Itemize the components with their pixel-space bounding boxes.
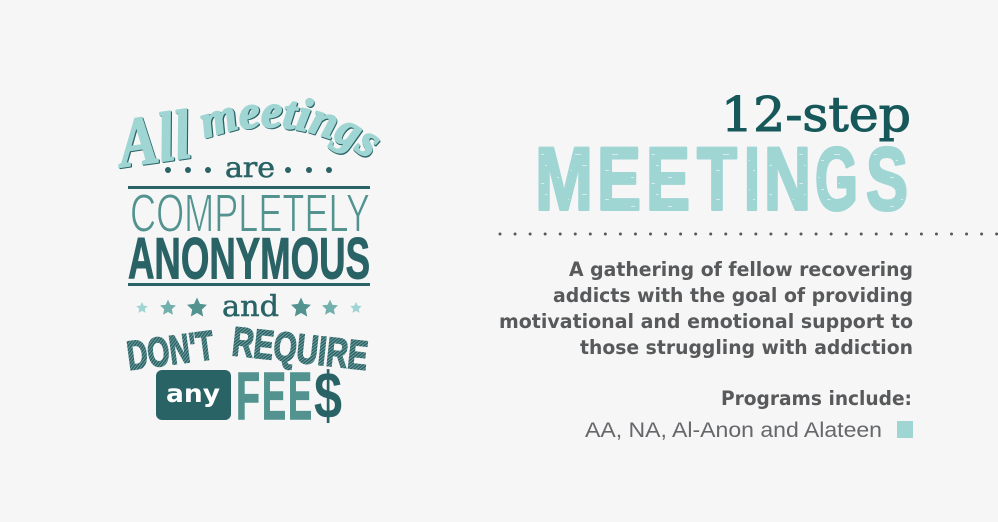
badge: any [156, 370, 231, 420]
heading: MEETINGS: I [744, 128, 760, 228]
description text: those struggling with addiction [580, 336, 913, 359]
script heading: All meetings: meetings [202, 100, 381, 158]
heading: MEETINGS [535, 128, 908, 228]
word: FEE$ [236, 358, 342, 434]
heading: 12-step: 12-step [721, 87, 911, 143]
stars and word: and: and [222, 289, 279, 323]
arched words: DON'T REQUIRE: REQUIRE [230, 318, 370, 379]
bottom rule [128, 283, 370, 286]
heading: MEETINGS: N [764, 128, 811, 228]
arched words: DON'T REQUIRE [124, 318, 370, 379]
word: FEE$: E [262, 359, 286, 434]
dots and word: are: are [225, 151, 275, 184]
stars and word: and [136, 289, 362, 323]
arched words: DON'T REQUIRE: DON'T [124, 322, 216, 379]
script heading: All meetings: All [110, 97, 196, 183]
programs list: AA, NA, Al-Anon and Alateen [585, 419, 882, 442]
panel: anonymity typographic badge [110, 97, 381, 434]
description text: motivational and emotional support to [499, 310, 913, 333]
heading: MEETINGS: T [697, 128, 737, 228]
panel: meeting description [499, 87, 998, 442]
heading: MEETINGS: E [597, 128, 641, 228]
heading: MEETINGS: E [646, 128, 690, 228]
heading: MEETINGS: S [866, 128, 908, 228]
word: COMPLETELY: COMPLETELY [130, 184, 370, 244]
badge: any: any [166, 379, 220, 408]
word: FEE$: F [236, 359, 260, 434]
heading: MEETINGS: G [815, 128, 858, 228]
programs heading: Programs include: [721, 387, 912, 410]
heading: MEETINGS: M [535, 128, 593, 228]
script heading: All meetings: All [111, 97, 197, 184]
word: FEE$: $ [314, 358, 342, 432]
legend square [897, 421, 913, 438]
word: FEE$: E [288, 359, 312, 434]
description text [499, 258, 913, 359]
top rule [128, 186, 370, 189]
word: ANONYMOUS: ANONYMOUS [128, 226, 370, 292]
dots and word: are [165, 151, 332, 184]
dotted divider [500, 232, 998, 236]
description text: addicts with the goal of providing [553, 284, 913, 307]
script heading: All meetings [110, 97, 381, 184]
script heading: All meetings: meetings [200, 98, 380, 156]
description text: A gathering of fellow recovering [569, 258, 913, 281]
